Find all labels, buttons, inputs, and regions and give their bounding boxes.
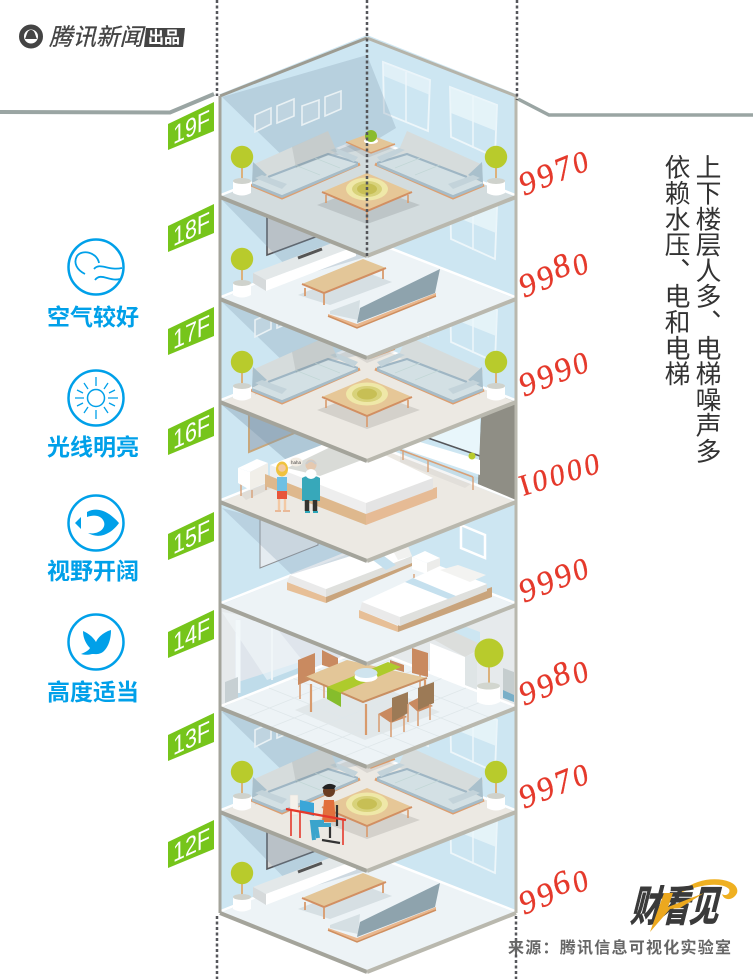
price: 19F 9970: 9970 [514, 142, 596, 203]
building outline [220, 38, 516, 913]
ground line: left [0, 94, 214, 112]
room: 14F dining room [220, 546, 516, 767]
person at red desk [286, 784, 346, 845]
speech bubble [290, 458, 302, 466]
side note: text line 2: 依赖水压、电和电梯 [661, 154, 689, 386]
benefit: view: 视野开阔 [47, 558, 139, 584]
dining chairs: front [378, 682, 434, 737]
price: 16F 10000: I0000 [515, 446, 606, 503]
plant: large [474, 638, 504, 705]
price: 15F 9990: 9990 [514, 549, 596, 610]
room: 18F TV room [220, 137, 516, 358]
label: 19F: 19F [173, 104, 210, 150]
icon: eye [68, 496, 124, 550]
price: 14F 9980: 0 [567, 654, 596, 691]
nightstand [412, 551, 440, 580]
price: 12F 9960: 6 [547, 863, 578, 904]
benefit: air [47, 240, 139, 330]
room: 13F living room with person at desk [220, 650, 516, 871]
label: 13F: 13F [173, 715, 210, 761]
dining table [305, 660, 427, 735]
price: 14F 9980: 8 [547, 654, 578, 695]
room: 15F twin bedroom [220, 443, 516, 664]
price: 14F 9980: 99 [514, 666, 562, 713]
speech bubble: haha [291, 460, 302, 465]
price: 18F 9980: 8 [547, 246, 578, 287]
lightning bolt [650, 893, 704, 932]
swoosh [680, 879, 737, 899]
benefit: view [47, 496, 139, 584]
room: 16F bedroom with two figures [220, 340, 516, 561]
bed: rear [287, 546, 412, 603]
source line: 来源：腾讯信息可视化实验室 [508, 938, 731, 957]
price: 18F 9980: 0 [567, 246, 596, 283]
dashed guide lines [217, 0, 517, 979]
icon: sun [68, 370, 124, 426]
price numbers [512, 142, 606, 922]
label: 17F: 17F [173, 309, 210, 355]
benefit: light: 光线明亮 [47, 434, 139, 460]
figure: girl [275, 462, 290, 511]
room: 19F living room [220, 35, 516, 256]
side note: text line 1: 上下楼层人多、电梯噪声多 [692, 154, 720, 464]
label: 14F: 14F [173, 612, 210, 658]
badge: 出品: 出品 [148, 28, 180, 47]
benefit: light [47, 370, 139, 460]
label: 16F: 16F [173, 409, 210, 455]
room: 17F living room [220, 240, 516, 461]
ground line: right [518, 99, 753, 115]
label: 12F: 12F [173, 822, 210, 868]
floor labels [168, 102, 214, 868]
benefit: height [47, 614, 139, 705]
figure: old man [302, 460, 320, 512]
benefit: air: 空气较好 [47, 304, 139, 330]
icon: bird [68, 614, 124, 670]
bed: front [359, 565, 492, 632]
price: 13F 9970: 9970 [514, 755, 596, 816]
icon: wind and cloud [68, 240, 124, 294]
price: 17F 9990: 9990 [514, 343, 596, 404]
icon: Tencent News mark [22, 27, 40, 46]
benefit: height: 高度适当 [47, 679, 139, 705]
dining chairs: rear [298, 648, 428, 699]
bed [265, 436, 437, 525]
label: 15F: 15F [173, 514, 210, 560]
label: 18F: 18F [173, 206, 210, 252]
logo: Tencent News: 腾讯新闻 [49, 24, 146, 50]
nightstand [238, 459, 272, 500]
room: 12F TV room [220, 751, 516, 972]
price: 18F 9980: 99 [514, 258, 562, 305]
sideboard [398, 436, 480, 490]
price: 12F 9960: 0 [567, 863, 596, 900]
price: 12F 9960: 99 [514, 875, 562, 922]
logo: Tencent News [22, 24, 185, 50]
